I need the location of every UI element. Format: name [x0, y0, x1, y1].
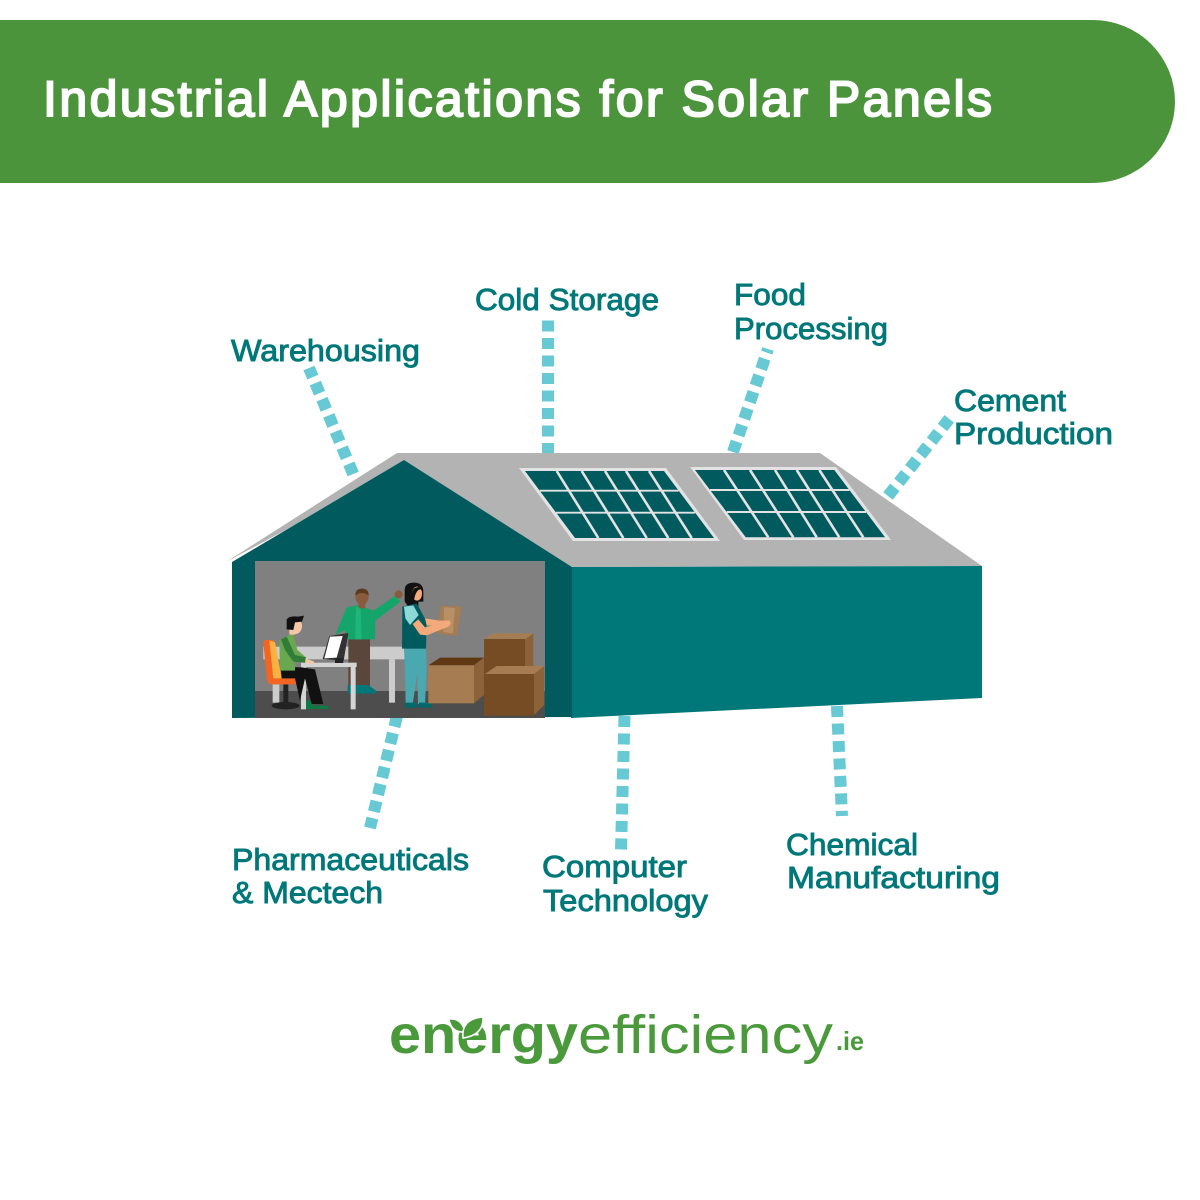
warehouse building [226, 453, 982, 718]
logo: energyefficiency.ie [389, 1005, 864, 1065]
label: chemical manufacturing: Manufacturing [787, 860, 1000, 895]
label: cement production: Cement [954, 383, 1066, 418]
label: warehousing: Warehousing [231, 333, 420, 368]
label: food processing [734, 277, 888, 346]
label: food processing: Food [734, 277, 806, 312]
computer monitor [323, 633, 348, 663]
workers scene [263, 583, 544, 716]
logo: energyefficiency.ie: efficiency [578, 1005, 833, 1065]
label: pharmaceuticals and mectech: Pharmaceuticals [232, 842, 469, 877]
label: chemical manufacturing: Chemical [786, 827, 918, 862]
back table [263, 647, 405, 703]
desk [301, 663, 357, 709]
roof [226, 453, 982, 567]
solar panel left [519, 468, 720, 541]
dotted connector: cold storage [542, 320, 554, 454]
dotted connector: cement production [888, 418, 950, 496]
label: pharmaceuticals and mectech [232, 842, 469, 910]
office chair [263, 640, 301, 709]
dotted connector: warehousing [309, 368, 353, 474]
seated man [279, 616, 328, 709]
cardboard boxes [428, 633, 544, 716]
right wall [571, 566, 982, 718]
title: Industrial Applications for Solar Panels [43, 71, 992, 127]
logo: energyefficiency.ie: .ie [836, 1026, 864, 1056]
dotted connector: computer technology [621, 716, 624, 850]
label: computer technology: Computer [542, 849, 687, 884]
dotted connector: pharmaceuticals [370, 716, 397, 828]
front gable wall [232, 460, 572, 718]
standing man [335, 589, 403, 694]
label: cement production: Production [954, 416, 1113, 451]
label: chemical manufacturing [786, 827, 1000, 895]
label: food processing: Processing [734, 311, 888, 346]
label: pharmaceuticals and mectech: & Mectech [232, 875, 383, 910]
label: cement production [954, 383, 1113, 451]
icon: logo leaf [449, 1017, 483, 1038]
label: computer technology: Technology [543, 883, 709, 918]
dotted connector: chemical manufacturing [837, 706, 842, 816]
logo: energyefficiency.ie: energy [389, 1005, 578, 1065]
label: cold storage: Cold Storage [475, 282, 659, 317]
title banner [0, 20, 1175, 183]
solar panel right [690, 467, 891, 540]
dotted connector: food processing [733, 349, 768, 452]
interior back wall [255, 561, 545, 691]
woman with parcel [402, 583, 462, 708]
label: computer technology [542, 849, 709, 918]
interior floor [255, 691, 545, 718]
